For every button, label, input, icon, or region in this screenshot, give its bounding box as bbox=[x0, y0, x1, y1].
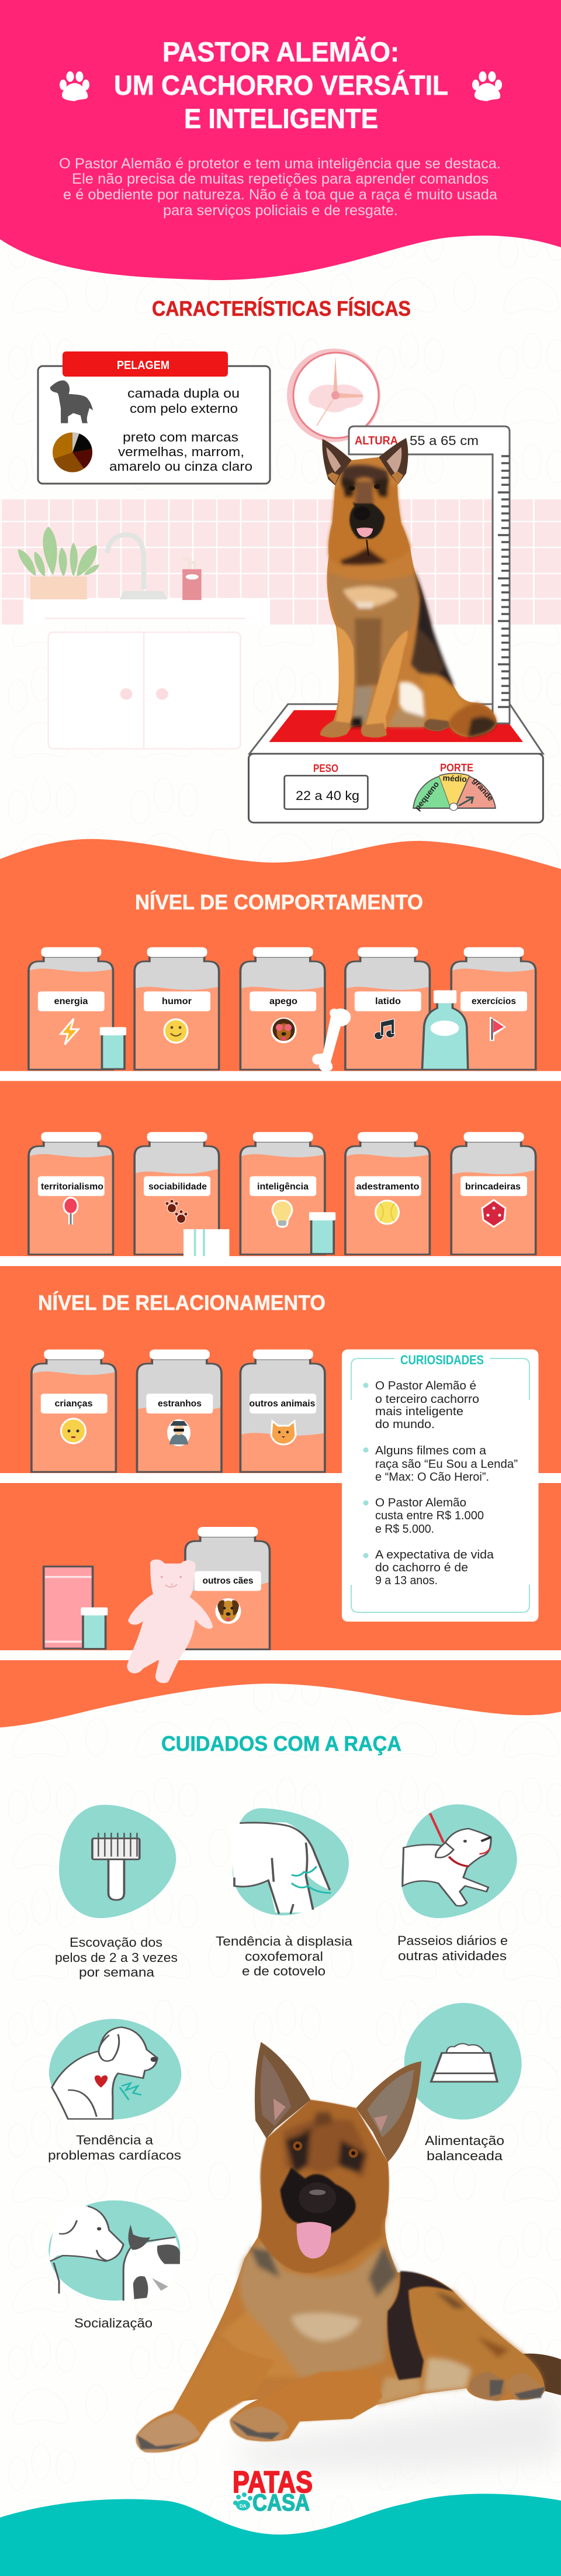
jar: energia: energia bbox=[54, 996, 88, 1006]
curiosidades text: custa entre R$ 1.000 bbox=[375, 1509, 484, 1522]
decor: large bottle bbox=[422, 990, 468, 1070]
jar: humor: humor bbox=[162, 996, 192, 1006]
jar: energia bbox=[29, 947, 113, 1070]
title bbox=[114, 36, 448, 134]
size gauge: PORTE bbox=[440, 762, 473, 774]
curiosidades text: O Pastor Alemão bbox=[375, 1496, 466, 1509]
caption: pelos de 2 a 3 vezes bbox=[55, 1950, 178, 1965]
curiosidades text: A expectativa de vida bbox=[375, 1549, 494, 1561]
jar: outros animais: outros animais bbox=[249, 1399, 316, 1409]
jar: brincadeiras: brincadeiras bbox=[465, 1182, 521, 1192]
care item: alimentação bbox=[404, 2003, 522, 2163]
caption: coxofemoral bbox=[245, 1949, 323, 1964]
jar: territorialismo: territorialismo bbox=[41, 1182, 103, 1192]
curiosidades text: 9 a 13 anos. bbox=[375, 1574, 438, 1587]
bathroom background bbox=[0, 499, 561, 749]
icon: pin bbox=[64, 1198, 78, 1225]
icon: dog silhouette bbox=[50, 380, 93, 423]
caption: Tendência à displasia bbox=[216, 1934, 353, 1949]
icon: cat bbox=[271, 1421, 296, 1444]
height value: 55 a 65 cm bbox=[410, 433, 479, 448]
caption: Passeios diários e bbox=[397, 1933, 508, 1948]
jar: adestramento bbox=[345, 1132, 430, 1254]
jar: humor bbox=[134, 947, 219, 1070]
decor: small bottle 2 bbox=[309, 1212, 335, 1254]
pelagem tab: PELAGEM bbox=[117, 359, 169, 372]
curiosidades text: Alguns filmes com a bbox=[375, 1444, 487, 1457]
caption: Escovação dos bbox=[70, 1935, 162, 1950]
title: UM CACHORRO VERSÁTIL bbox=[114, 70, 448, 101]
caption: e de cotovelo bbox=[242, 1964, 325, 1978]
care item: passeios bbox=[397, 1804, 517, 1963]
jar: crianças bbox=[32, 1350, 116, 1472]
jar: exercícios bbox=[451, 947, 536, 1070]
jar: sociabilidade bbox=[134, 1132, 219, 1254]
intro paragraph: e é obediente por natureza. Não é à toa que a raça é muito usada bbox=[63, 187, 497, 203]
jar: outros animais bbox=[240, 1350, 325, 1472]
weight readout: 22 a 40 kg bbox=[296, 788, 359, 803]
jar: apego: apego bbox=[269, 996, 297, 1006]
jar: estranhos bbox=[137, 1350, 221, 1472]
height ruler bbox=[349, 426, 510, 723]
caption bbox=[55, 1935, 178, 1980]
care item: socialização bbox=[49, 2201, 181, 2330]
intro paragraph bbox=[59, 156, 501, 219]
photo: lying German Shepherd bbox=[136, 2042, 561, 2452]
logo: DA bbox=[240, 2503, 247, 2509]
caption: por semana bbox=[79, 1965, 155, 1980]
jar: crianças: crianças bbox=[55, 1399, 93, 1409]
curiosidades text: mais inteligente bbox=[375, 1405, 463, 1418]
heading: cuidados com a raça: CUIDADOS COM A RAÇA bbox=[161, 1732, 401, 1756]
curiosidades text bbox=[375, 1380, 518, 1587]
text: cores: preto com marcas bbox=[123, 430, 238, 444]
size gauge: pequeno bbox=[413, 780, 441, 812]
jar: apego bbox=[240, 947, 325, 1070]
caption: outras atividades bbox=[398, 1949, 507, 1963]
jar: latido: latido bbox=[375, 996, 401, 1006]
curiosidades text: do mundo. bbox=[375, 1418, 435, 1431]
text: camada bbox=[127, 386, 240, 416]
shelves bbox=[0, 1071, 561, 1660]
icon: spy bbox=[167, 1419, 191, 1446]
clock bbox=[287, 349, 380, 442]
title: PASTOR ALEMÃO: bbox=[162, 36, 399, 67]
icon: flag bbox=[490, 1017, 506, 1041]
footer band bbox=[0, 2494, 561, 2576]
caption bbox=[48, 2133, 181, 2163]
text: cores: vermelhas, marrom, bbox=[118, 444, 244, 459]
jar: adestramento: adestramento bbox=[356, 1182, 420, 1192]
orange section background bbox=[0, 839, 561, 1727]
intro paragraph: O Pastor Alemão é protetor e tem uma inteligência que se destaca. bbox=[59, 156, 501, 172]
icon: bulb bbox=[272, 1201, 292, 1227]
logo: PATAS bbox=[233, 2465, 313, 2499]
text: camada: camada dupla ou bbox=[127, 386, 240, 401]
curiosidades text: O Pastor Alemão é bbox=[375, 1380, 476, 1392]
decor: white box bbox=[183, 1229, 229, 1256]
intro paragraph: para serviços policiais e de resgate. bbox=[163, 202, 398, 219]
scale base bbox=[248, 704, 543, 823]
heading: nível de comportamento: NÍVEL DE COMPORTAMENTO bbox=[135, 890, 423, 914]
curiosidades text: e “Max: O Cão Heroi”. bbox=[375, 1471, 489, 1484]
panel: curiosidades bbox=[342, 1350, 539, 1622]
icon: paws bbox=[165, 1199, 188, 1223]
care item: escovação bbox=[55, 1805, 178, 1980]
logo bbox=[233, 2465, 313, 2516]
icon: dog with heart eyes bbox=[271, 1018, 297, 1043]
jar: outros cães bbox=[185, 1527, 269, 1649]
header band bbox=[0, 0, 561, 280]
floor shadow bbox=[234, 2395, 561, 2471]
heading: características físicas: CARACTERÍSTICAS FÍSICAS bbox=[152, 296, 411, 320]
size gauge: médio bbox=[442, 773, 467, 784]
panel: pelagem bbox=[38, 351, 270, 484]
caption bbox=[397, 1933, 508, 1963]
caption bbox=[425, 2133, 504, 2163]
decor: small bottle 3 bbox=[81, 1608, 108, 1649]
icon: dog face bbox=[215, 1598, 241, 1624]
bullets bbox=[363, 1382, 368, 1558]
pelagem tab bbox=[63, 351, 228, 377]
title: E INTELIGENTE bbox=[184, 103, 378, 134]
text: cores bbox=[109, 430, 252, 474]
altura label: ALTURA bbox=[355, 434, 398, 447]
heading: nível de relacionamento: NÍVEL DE RELACIONAMENTO bbox=[38, 1291, 325, 1315]
jar: exercícios: exercícios bbox=[472, 996, 516, 1006]
jar: brincadeiras bbox=[451, 1132, 536, 1254]
size gauge: grande bbox=[471, 776, 496, 803]
jar: outros cães: outros cães bbox=[202, 1576, 254, 1586]
jar: latido bbox=[345, 947, 430, 1070]
curiosidades text: raça são “Eu Sou a Lenda” bbox=[375, 1458, 518, 1471]
caption: balanceada bbox=[427, 2149, 503, 2163]
jar: inteligência bbox=[240, 1132, 325, 1254]
curiosidades text: o terceiro cachorro bbox=[375, 1393, 479, 1406]
caption bbox=[216, 1934, 353, 1978]
icon: dice bbox=[482, 1200, 505, 1227]
size gauge bbox=[413, 762, 496, 812]
jar: sociabilidade: sociabilidade bbox=[148, 1182, 207, 1192]
icon: left paw bbox=[60, 71, 89, 101]
lying dog head bbox=[258, 2100, 389, 2273]
icon: right paw bbox=[472, 71, 502, 101]
caption: Socialização bbox=[74, 2316, 153, 2330]
weight readout: PESO bbox=[313, 763, 338, 774]
icon: music note bbox=[375, 1019, 394, 1039]
text: cores: amarelo ou cinza claro bbox=[109, 459, 252, 474]
caption: Tendência a bbox=[76, 2133, 154, 2147]
weight readout bbox=[296, 763, 359, 803]
icon: lightning bbox=[61, 1019, 78, 1044]
jar: territorialismo bbox=[29, 1132, 113, 1254]
curiosidades text: do cachorro é de bbox=[375, 1561, 468, 1574]
logo: CASA bbox=[252, 2490, 310, 2516]
jar: estranhos: estranhos bbox=[158, 1399, 202, 1409]
decor: small bottle bbox=[100, 1027, 126, 1069]
caption: Alimentação bbox=[425, 2133, 504, 2148]
photo: seated German Shepherd bbox=[320, 438, 497, 737]
care item: cardíacos bbox=[48, 2019, 181, 2163]
care item: displasia bbox=[216, 1808, 353, 1978]
ruff and head bbox=[328, 465, 411, 564]
jar: inteligência: inteligência bbox=[257, 1182, 309, 1192]
decor: bone bbox=[312, 1008, 351, 1071]
decor: teddy bear bbox=[127, 1560, 213, 1683]
icon: tennis ball bbox=[375, 1201, 399, 1224]
intro paragraph: Ele não precisa de muitas repetições para aprender comandos bbox=[72, 171, 489, 187]
text: camada: com pelo externo bbox=[130, 401, 238, 416]
decor: pink box bbox=[44, 1567, 93, 1649]
icon: baby bbox=[61, 1419, 85, 1443]
caption: problemas cardíacos bbox=[48, 2148, 181, 2163]
pie chart: coat colours bbox=[53, 432, 92, 473]
icon: smile bbox=[164, 1019, 188, 1043]
curiosidades text: e R$ 5.000. bbox=[375, 1523, 434, 1536]
curiosidades title: CURIOSIDADES bbox=[400, 1353, 484, 1367]
